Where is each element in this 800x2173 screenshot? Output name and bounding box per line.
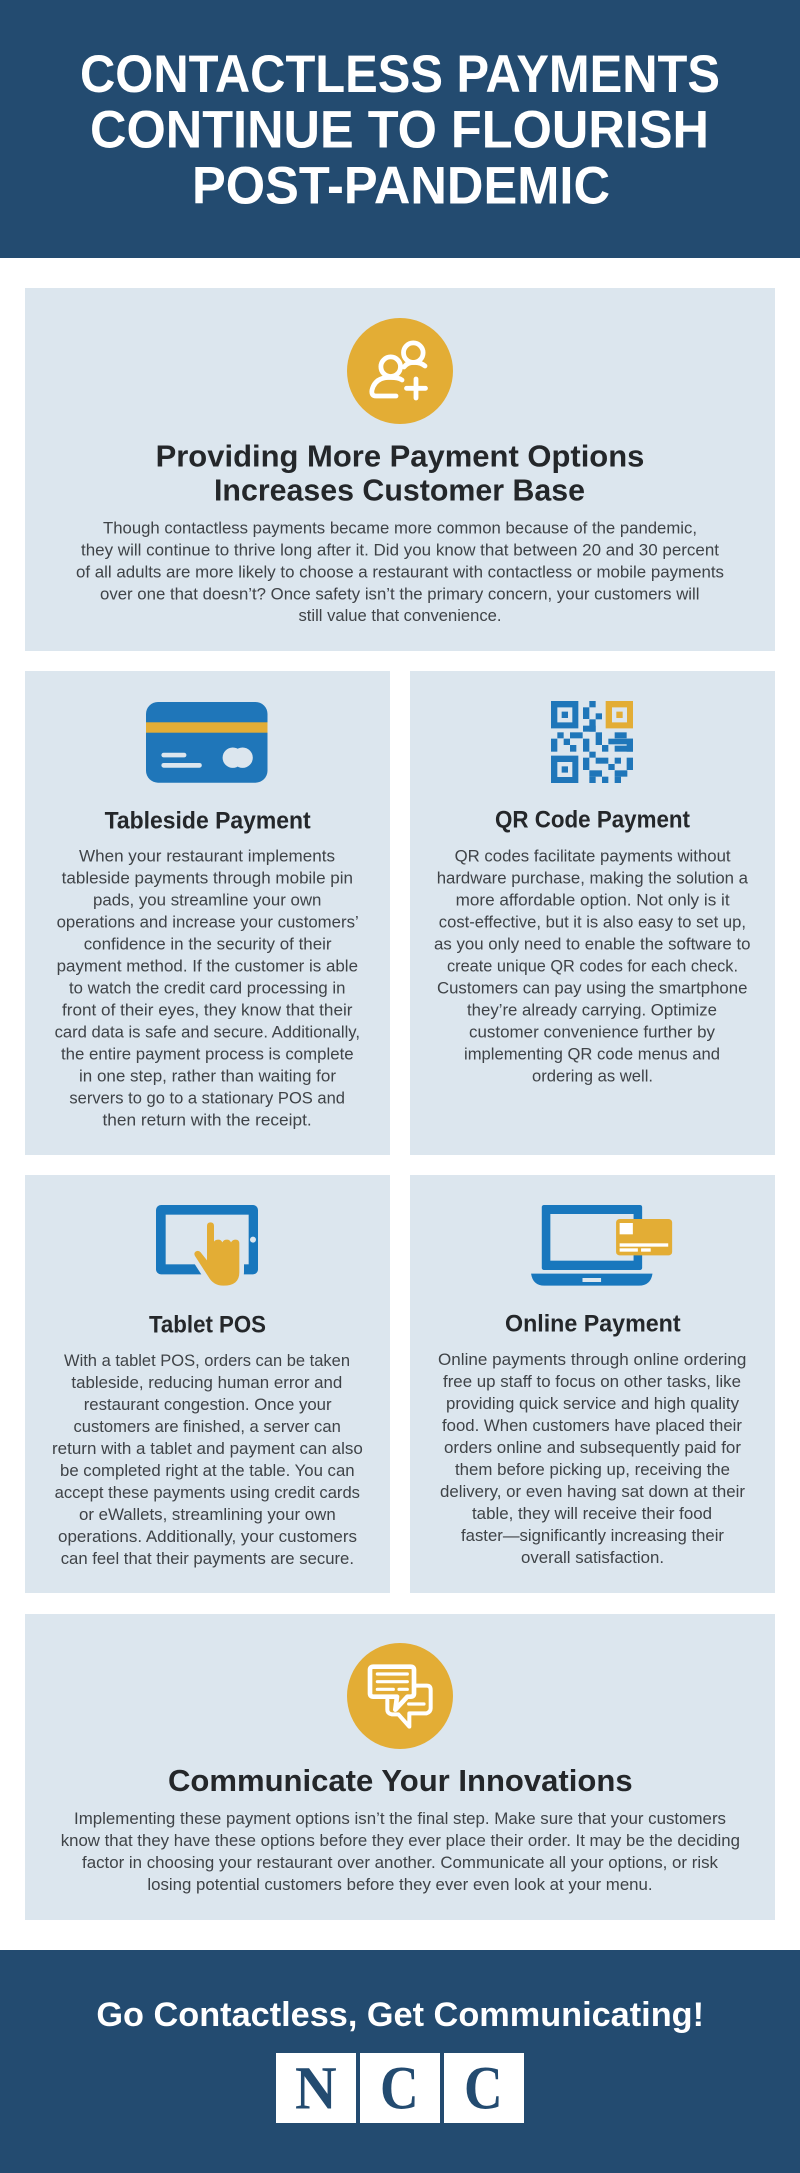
heading: QR Code Payment bbox=[495, 806, 690, 833]
panel: tablet POS bbox=[25, 1175, 390, 1593]
body text: operations. Additionally, your customers bbox=[58, 1527, 357, 1546]
icon: speech bubbles bbox=[347, 1643, 453, 1749]
NCC logo: N bbox=[295, 2055, 337, 2122]
body text: overall satisfaction. bbox=[521, 1548, 664, 1567]
body text: or eWallets, streamlining your own bbox=[79, 1505, 336, 1524]
body text: confidence in the security of their bbox=[84, 934, 332, 953]
body text: return with a tablet and payment can also bbox=[52, 1439, 363, 1458]
body text: operations and increase your customers’ bbox=[57, 912, 359, 931]
body text: then return with the receipt. bbox=[102, 1110, 312, 1129]
body text: card data is safe and secure. Additionally, bbox=[55, 1022, 360, 1041]
body text bbox=[52, 1351, 363, 1568]
header banner bbox=[0, 0, 800, 258]
body text: tableside, reducing human error and bbox=[71, 1373, 342, 1392]
body text: providing quick service and high quality bbox=[446, 1394, 739, 1413]
body text: delivery, or even having sat down at their bbox=[440, 1482, 745, 1501]
title bbox=[80, 45, 720, 216]
body text: can feel that their payments are secure. bbox=[61, 1549, 354, 1568]
heading: Increases Customer Base bbox=[214, 472, 585, 507]
body text: customer convenience further by bbox=[469, 1022, 715, 1041]
body text: cost-effective, but it is also easy to set up, bbox=[439, 912, 746, 931]
body text: table, they will receive their food bbox=[472, 1504, 712, 1523]
body text: still value that convenience. bbox=[298, 606, 502, 625]
body text: factor in choosing your restaurant over another. Communicate all your options, or risk bbox=[82, 1853, 718, 1872]
panel: communicate your innovations bbox=[25, 1614, 775, 1920]
body text: free up staff to focus on other tasks, like bbox=[443, 1372, 741, 1391]
call to action: Go Contactless, Get Communicating! bbox=[96, 1996, 704, 2034]
body text: QR codes facilitate payments without bbox=[455, 846, 731, 865]
body text: customers are finished, a server can bbox=[74, 1417, 341, 1436]
body text: faster—significantly increasing their bbox=[461, 1526, 724, 1545]
body text: in one step, rather than waiting for bbox=[79, 1066, 336, 1085]
panel: online payment bbox=[410, 1175, 775, 1593]
body text: orders online and subsequently paid for bbox=[444, 1438, 741, 1457]
body text: servers to go to a stationary POS and bbox=[69, 1088, 345, 1107]
body text bbox=[434, 846, 750, 1085]
body text: payment method. If the customer is able bbox=[57, 956, 358, 975]
body text bbox=[76, 519, 724, 625]
body text: of all adults are more likely to choose a restaurant with contactless or mobile payments bbox=[76, 562, 724, 581]
body text: as you only need to enable the software to bbox=[434, 934, 750, 953]
body text: tableside payments through mobile pin bbox=[62, 868, 353, 887]
body text: Customers can pay using the smartphone bbox=[437, 978, 747, 997]
body text: Implementing these payment options isn’t the final step. Make sure that your customers bbox=[74, 1809, 726, 1828]
panel: more payment options bbox=[25, 288, 775, 651]
icon: laptop with card bbox=[531, 1205, 672, 1286]
heading: Tableside Payment bbox=[105, 807, 311, 834]
body text bbox=[438, 1350, 746, 1567]
heading: Communicate Your Innovations bbox=[168, 1763, 633, 1798]
title: CONTINUE TO FLOURISH bbox=[90, 100, 709, 160]
title: CONTACTLESS PAYMENTS bbox=[80, 45, 720, 104]
body text: know that they have these options before they ever place their order. It may be the deciding bbox=[61, 1831, 740, 1850]
panel: tableside payment bbox=[25, 671, 390, 1155]
NCC logo: C bbox=[380, 2055, 419, 2122]
body text: Online payments through online ordering bbox=[438, 1350, 746, 1369]
body text: they will continue to thrive long after it. Did you know that between 20 and 30 percent bbox=[81, 541, 719, 560]
body text: pads, you streamline your own bbox=[93, 890, 321, 909]
body text: restaurant congestion. Once your bbox=[84, 1395, 332, 1414]
body text: accept these payments using credit cards bbox=[55, 1483, 360, 1502]
footer banner bbox=[0, 1950, 800, 2173]
body text: front of their eyes, they know that their bbox=[62, 1000, 353, 1019]
body text bbox=[55, 846, 360, 1129]
body text: ordering as well. bbox=[532, 1066, 653, 1085]
heading bbox=[156, 438, 644, 507]
NCC logo: C bbox=[464, 2055, 503, 2122]
panel: QR code payment bbox=[410, 671, 775, 1155]
body text: the entire payment process is complete bbox=[61, 1044, 354, 1063]
body text: they’re already carrying. Optimize bbox=[467, 1000, 717, 1019]
NCC logo bbox=[276, 2053, 524, 2123]
heading: Providing More Payment Options bbox=[156, 438, 644, 473]
body text: over one that doesn’t? Once safety isn’t the primary concern, your customers will bbox=[100, 584, 700, 603]
heading: Online Payment bbox=[505, 1311, 681, 1338]
body text: When your restaurant implements bbox=[79, 846, 335, 865]
body text bbox=[61, 1809, 740, 1894]
title: POST-PANDEMIC bbox=[192, 156, 610, 216]
body text: Though contactless payments became more common because of the pandemic, bbox=[103, 519, 697, 538]
heading: Tablet POS bbox=[149, 1312, 266, 1339]
body text: them before picking up, receiving the bbox=[455, 1460, 730, 1479]
body text: be completed right at the table. You can bbox=[60, 1461, 355, 1480]
body text: create unique QR codes for each check. bbox=[447, 956, 738, 975]
body text: food. When customers have placed their bbox=[442, 1416, 742, 1435]
icon: QR code bbox=[551, 701, 633, 783]
body text: to watch the credit card processing in bbox=[69, 978, 345, 997]
icon: tablet with tapping hand bbox=[156, 1205, 258, 1286]
body text: With a tablet POS, orders can be taken bbox=[64, 1351, 350, 1370]
body text: implementing QR code menus and bbox=[464, 1044, 720, 1063]
body text: more affordable option. Not only is it bbox=[456, 890, 730, 909]
icon: customers with plus bbox=[347, 318, 453, 424]
icon: credit card bbox=[146, 702, 268, 783]
body text: losing potential customers before they ever even look at your menu. bbox=[147, 1875, 653, 1894]
body text: hardware purchase, making the solution a bbox=[437, 868, 749, 887]
